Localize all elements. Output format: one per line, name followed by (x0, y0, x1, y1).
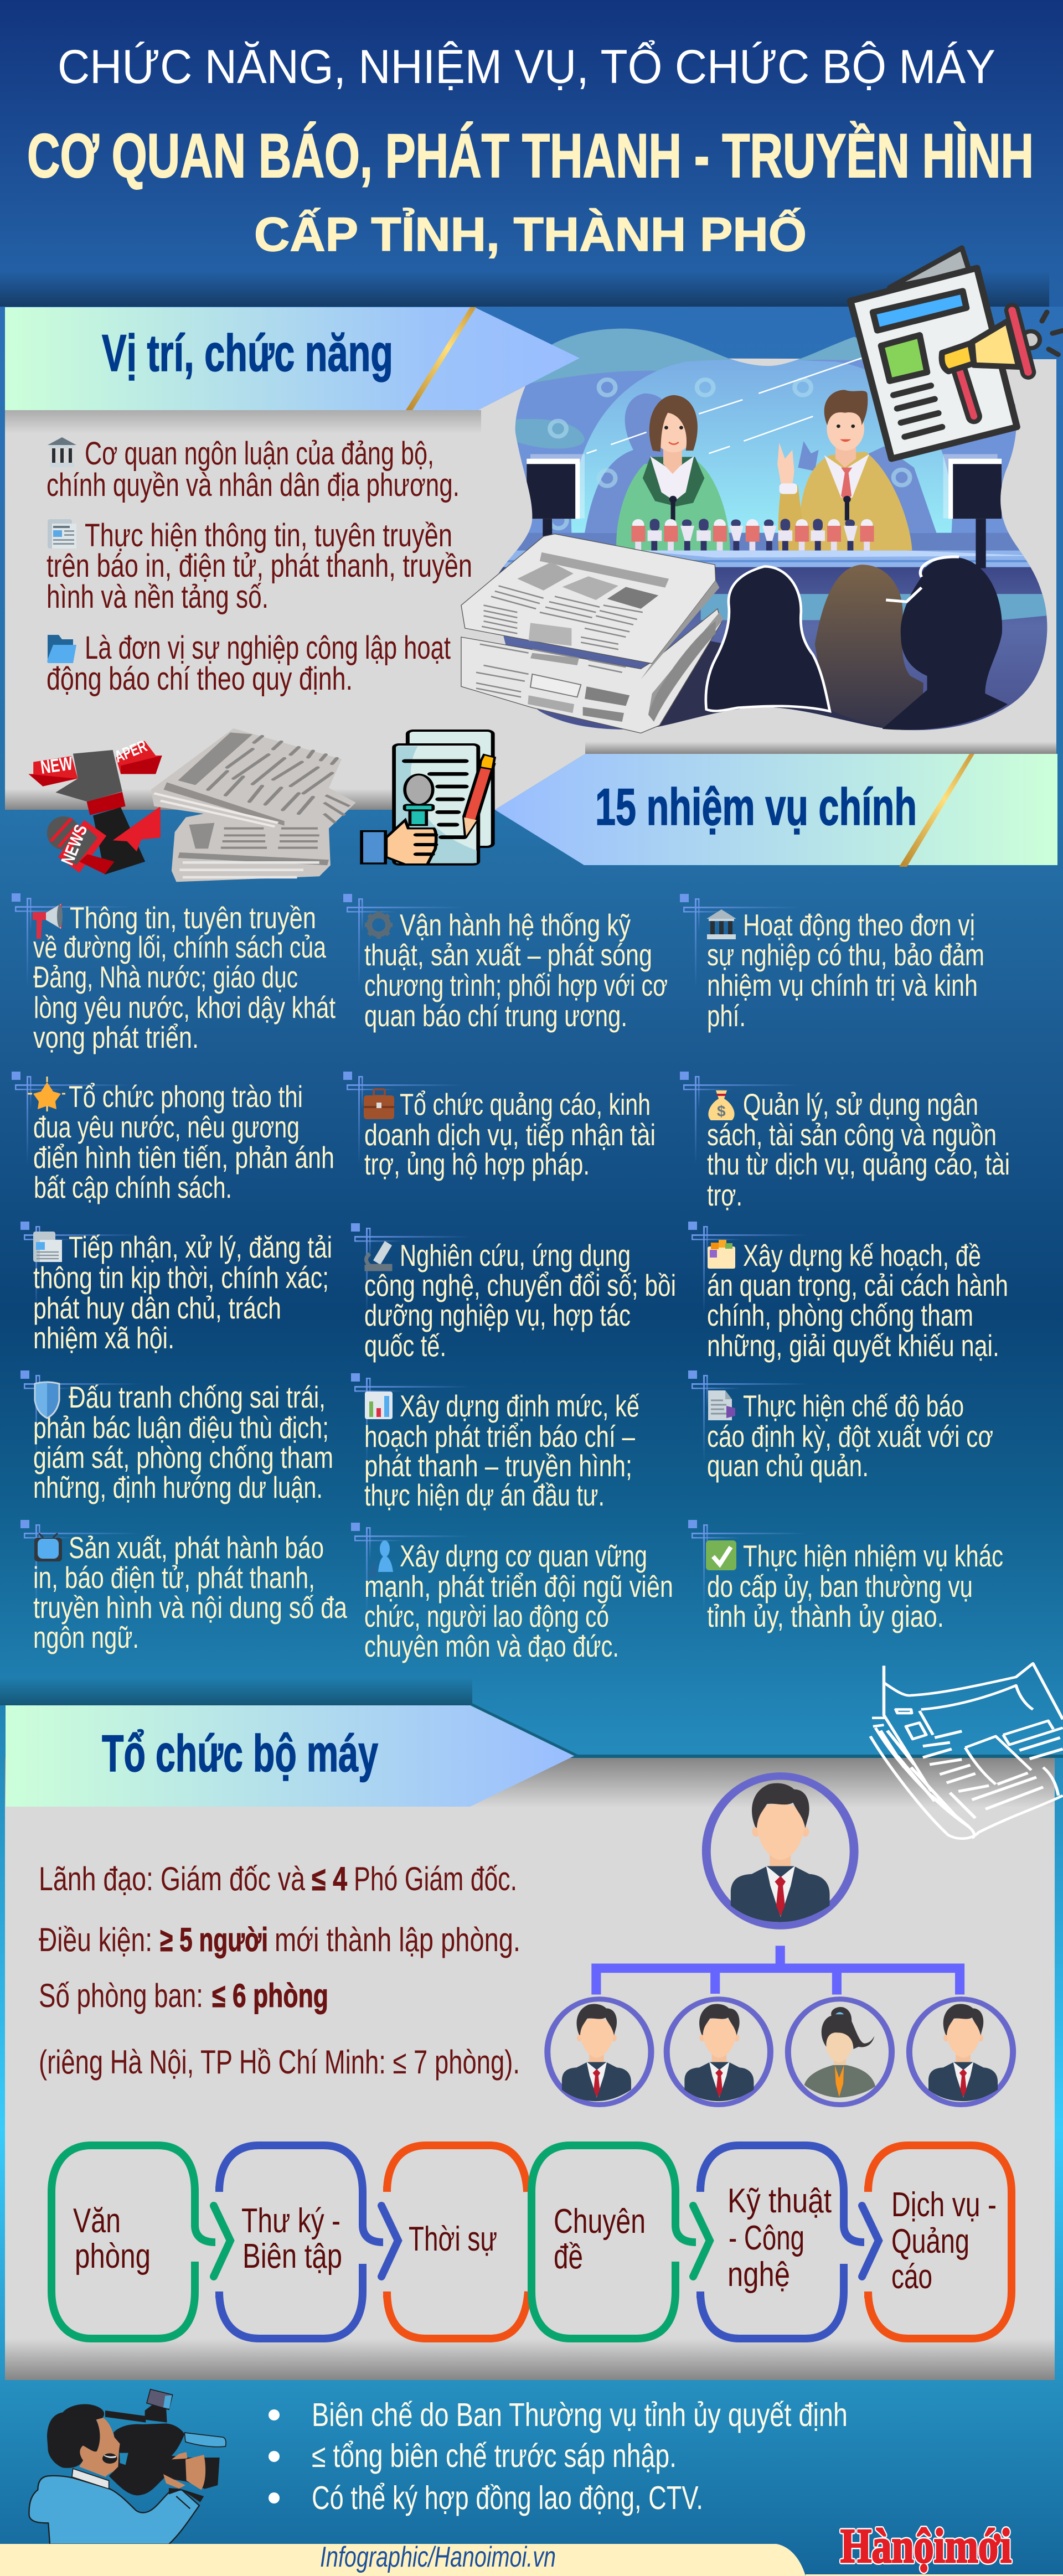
task 1: Đảng, Nhà nước; giáo dục (33, 960, 298, 994)
box: van phong: phòng (75, 2237, 151, 2275)
text block: organization: ≤ 4 (312, 1860, 347, 1897)
text block: vi tri chuc nang: Cơ quan ngôn luận của đảng bộ, (85, 436, 434, 472)
task 15 (688, 1520, 1003, 1633)
task 8: dưỡng nghiệp vụ, hợp tác (364, 1298, 631, 1332)
banner: vi tri chuc nang (5, 307, 580, 410)
icon: newspaper (48, 519, 76, 549)
task 4: bất cập chính sách. (34, 1170, 232, 1204)
task 8 (351, 1223, 676, 1363)
task 5 (343, 1072, 656, 1181)
label: news badges: NEW (39, 753, 74, 778)
task 3: phí. (707, 999, 746, 1033)
box: ky thuat cong nghe (700, 2145, 879, 2339)
illustration: press conference (461, 248, 1063, 750)
task 11: Xây dựng định mức, kế (400, 1389, 639, 1423)
task 6: trợ. (707, 1178, 742, 1212)
task 1: vọng phát triển. (33, 1020, 199, 1054)
task 14: chức, người lao động có (364, 1599, 609, 1633)
task 2: thuật, sản xuất – phát sóng (364, 938, 652, 972)
task 13: in, báo điện tử, phát thanh, (33, 1560, 315, 1595)
text block: organization: mới thành lập phòng. (275, 1921, 520, 1958)
woman presenter (616, 395, 730, 551)
director (706, 1776, 854, 1926)
task 1 (12, 893, 336, 1054)
task 2: quan báo chí trung ương. (364, 999, 627, 1033)
task 6: $ (717, 1103, 726, 1120)
task 9 (688, 1222, 1008, 1363)
box: thu ky bien tap: Thư ký - (241, 2202, 340, 2240)
task 13: ngôn ngữ. (33, 1620, 139, 1654)
text block: organization: (riêng Hà Nội, TP Hồ Chí Minh: ≤ 7 phòng). (39, 2044, 520, 2081)
banner: to chuc bo may: Tổ chức bộ máy (102, 1724, 378, 1782)
banner: vi tri chuc nang: Vị trí, chức năng (102, 324, 393, 382)
bullet list (269, 2397, 848, 2516)
box: ky thuat cong nghe: nghệ (727, 2256, 790, 2294)
task 3: Hoạt động theo đơn vị (743, 908, 975, 942)
icon: newspaper with megaphone (850, 248, 1063, 459)
box: thu ky bien tap (219, 2145, 383, 2339)
task 7: phát huy dân chủ, trách (33, 1291, 281, 1325)
text block: organization: Điều kiện: (39, 1921, 152, 1958)
box: dich vu quang cao: cáo (891, 2258, 932, 2296)
task 15: do cấp ủy, ban thường vụ (707, 1569, 973, 1603)
text block: vi tri chuc nang: Thực hiện thông tin, tuyên truyền (85, 518, 452, 554)
box: thoi su (381, 2145, 528, 2339)
box: thu ky bien tap: Biên tập (242, 2237, 342, 2275)
task 1: lòng yêu nước, khơi dậy khát (34, 990, 336, 1025)
task 9: chính, phòng chống tham (707, 1298, 973, 1332)
task 13: Sản xuất, phát hành báo (69, 1530, 324, 1565)
task 6 (680, 1072, 1010, 1212)
box: ky thuat cong nghe: Kỹ thuật (727, 2182, 832, 2220)
banner: 15 nhiem vu chinh: 15 nhiệm vụ chính (595, 778, 917, 836)
task 2 (343, 894, 668, 1033)
task 10: Đấu tranh chống sai trái, (69, 1380, 326, 1414)
text block: vi tri chuc nang: hình và nền tảng số. (47, 579, 269, 615)
banner: 15 nhiem vu chinh (495, 754, 1057, 867)
task 4: Tổ chức phong trào thi (69, 1079, 303, 1114)
icon: cameraman (29, 2389, 226, 2544)
connectors (591, 1946, 964, 1995)
task 4: điển hình tiên tiến, phản ánh (33, 1140, 334, 1175)
icon: bank building (48, 437, 76, 467)
logo: Hanoimoi: Hànộimới (840, 2520, 1012, 2573)
text block: vi tri chuc nang: động báo chí theo quy định. (47, 661, 353, 697)
box: dich vu quang cao: Quảng (891, 2222, 969, 2261)
speakers (527, 459, 580, 519)
org chart (548, 1776, 1013, 2104)
task 11: phát thanh – truyền hình; (364, 1449, 632, 1483)
task 15: tỉnh ủy, thành ủy giao. (707, 1599, 944, 1633)
task 4 (12, 1072, 334, 1204)
task 11 (351, 1373, 639, 1512)
text block: organization: ≤ 6 phòng (212, 1977, 328, 2014)
bullet list: ≤ tổng biên chế trước sáp nhập. (312, 2438, 677, 2474)
task 7: Tiếp nhận, xử lý, đăng tải (69, 1230, 332, 1264)
task 13: truyền hình và nội dung số đa (33, 1590, 347, 1625)
box: chuyen de: đề (554, 2238, 583, 2276)
task 7 (20, 1222, 332, 1355)
text block: organization: ≥ 5 người (160, 1921, 268, 1958)
bullet list: Có thể ký hợp đồng lao động, CTV. (312, 2480, 703, 2516)
box: ky thuat cong nghe: - Công (729, 2219, 804, 2257)
box: chuyen de (532, 2145, 710, 2339)
task 2: chương trình; phối hợp với cơ (364, 968, 668, 1002)
task 8: công nghệ, chuyển đổi số; bồi (364, 1268, 676, 1302)
icon: documents, handheld microphone (362, 731, 495, 865)
footer bar: Infographic/Hanoimoi.vn (320, 2541, 556, 2573)
deputy 4 (909, 1999, 1013, 2104)
task 8: Nghiên cứu, ứng dụng (400, 1238, 631, 1273)
task 1: Thông tin, tuyên truyền (70, 901, 316, 935)
task 13 (20, 1520, 347, 1654)
task 10 (20, 1370, 333, 1504)
task 7: thông tin kịp thời, chính xác; (33, 1260, 329, 1295)
title: CẤP TỈNH, THÀNH PHỐ (254, 208, 807, 261)
box: chuyen de: Chuyên (554, 2202, 646, 2241)
icon: crumpled newspapers (151, 728, 356, 882)
task 10: giám sát, phòng chống tham (33, 1440, 333, 1475)
task 3: nhiệm vụ chính trị và kinh (707, 968, 978, 1002)
title (27, 40, 1034, 261)
bullet list: Biên chế do Ban Thường vụ tỉnh ủy quyết định (312, 2397, 848, 2433)
task 3: sự nghiệp có thu, bảo đảm (707, 938, 984, 972)
task 1: về đường lối, chính sách của (33, 930, 326, 964)
task 5: doanh dịch vụ, tiếp nhận tài (364, 1118, 656, 1152)
newspaper stack (461, 534, 723, 733)
task 11: hoạch phát triển báo chí – (364, 1419, 635, 1453)
label: news badges (39, 737, 149, 868)
icon: news illustration hand, mic, paper plane (29, 741, 162, 875)
deputy 2 (667, 1999, 770, 2104)
deputy 3 woman (788, 1999, 892, 2104)
label: news badges: NEWS (57, 822, 91, 868)
text block: vi tri chuc nang: chính quyền và nhân dân địa phương. (47, 467, 460, 503)
text block: organization: Phó Giám đốc. (354, 1860, 517, 1897)
task 5: Tổ chức quảng cáo, kinh (400, 1087, 651, 1121)
text block: vi tri chuc nang (47, 436, 472, 697)
text block: organization: Lãnh đạo: Giám đốc và (39, 1860, 305, 1897)
task 6: Quản lý, sử dụng ngân (743, 1087, 978, 1121)
audience silhouettes (706, 557, 1008, 730)
task 11: thực hiện dự án đầu tư. (364, 1478, 605, 1512)
icon: sketched newspaper (870, 1663, 1063, 1839)
text block: vi tri chuc nang: Là đơn vị sự nghiệp công lập hoạt (85, 630, 451, 666)
task 3 (680, 894, 984, 1033)
task 10: những, định hướng dư luận. (33, 1470, 323, 1504)
task 14 (351, 1523, 673, 1663)
text block: vi tri chuc nang: trên báo in, điện tử, phát thanh, truyền (47, 548, 472, 584)
logo: Hanoimoi: Hànộimới (840, 2520, 1012, 2573)
microphones row (632, 519, 874, 551)
label: news badges: APER (112, 737, 149, 766)
table and stage (503, 550, 1031, 567)
title: CHỨC NĂNG, NHIỆM VỤ, TỔ CHỨC BỘ MÁY (58, 40, 995, 94)
text block: organization: Số phòng ban: (39, 1977, 203, 2014)
deputy 1 (548, 1999, 651, 2104)
panel: to chuc bo may (0, 1663, 1063, 2380)
box: dich vu quang cao: Dịch vụ - (891, 2186, 997, 2224)
man presenter (777, 390, 912, 551)
task 5: trợ, ủng hộ hợp pháp. (364, 1147, 590, 1181)
box: dich vu quang cao (868, 2145, 1012, 2339)
box: van phong: Văn (73, 2202, 121, 2240)
task 9: Xây dựng kế hoạch, đề (743, 1238, 981, 1273)
task 12: Thực hiện chế độ báo (743, 1389, 964, 1423)
task 12 (688, 1370, 993, 1483)
task 14: Xây dựng cơ quan vững (400, 1539, 647, 1573)
icon: folder (47, 635, 76, 663)
task 7: nhiệm xã hội. (33, 1321, 174, 1355)
banner: to chuc bo may (6, 1704, 577, 1807)
text block: organization (39, 1860, 520, 2081)
task 4: đua yêu nước, nêu gương (33, 1110, 300, 1144)
task 2: Vận hành hệ thống kỹ (400, 908, 631, 942)
task 14: chuyên môn và đạo đức. (364, 1629, 619, 1663)
task 8: quốc tế. (364, 1328, 446, 1363)
task 14: mạnh, phát triển đội ngũ viên (364, 1569, 673, 1603)
process boxes (51, 2145, 1012, 2339)
task 12: quan chủ quản. (707, 1449, 869, 1483)
box: van phong (51, 2145, 230, 2339)
panel: 15 nhiem vu (12, 893, 1010, 1663)
task 10: phản bác luận điệu thù địch; (33, 1410, 329, 1445)
box: thoi su: Thời sự (409, 2220, 497, 2258)
footer bar (0, 2541, 1063, 2576)
